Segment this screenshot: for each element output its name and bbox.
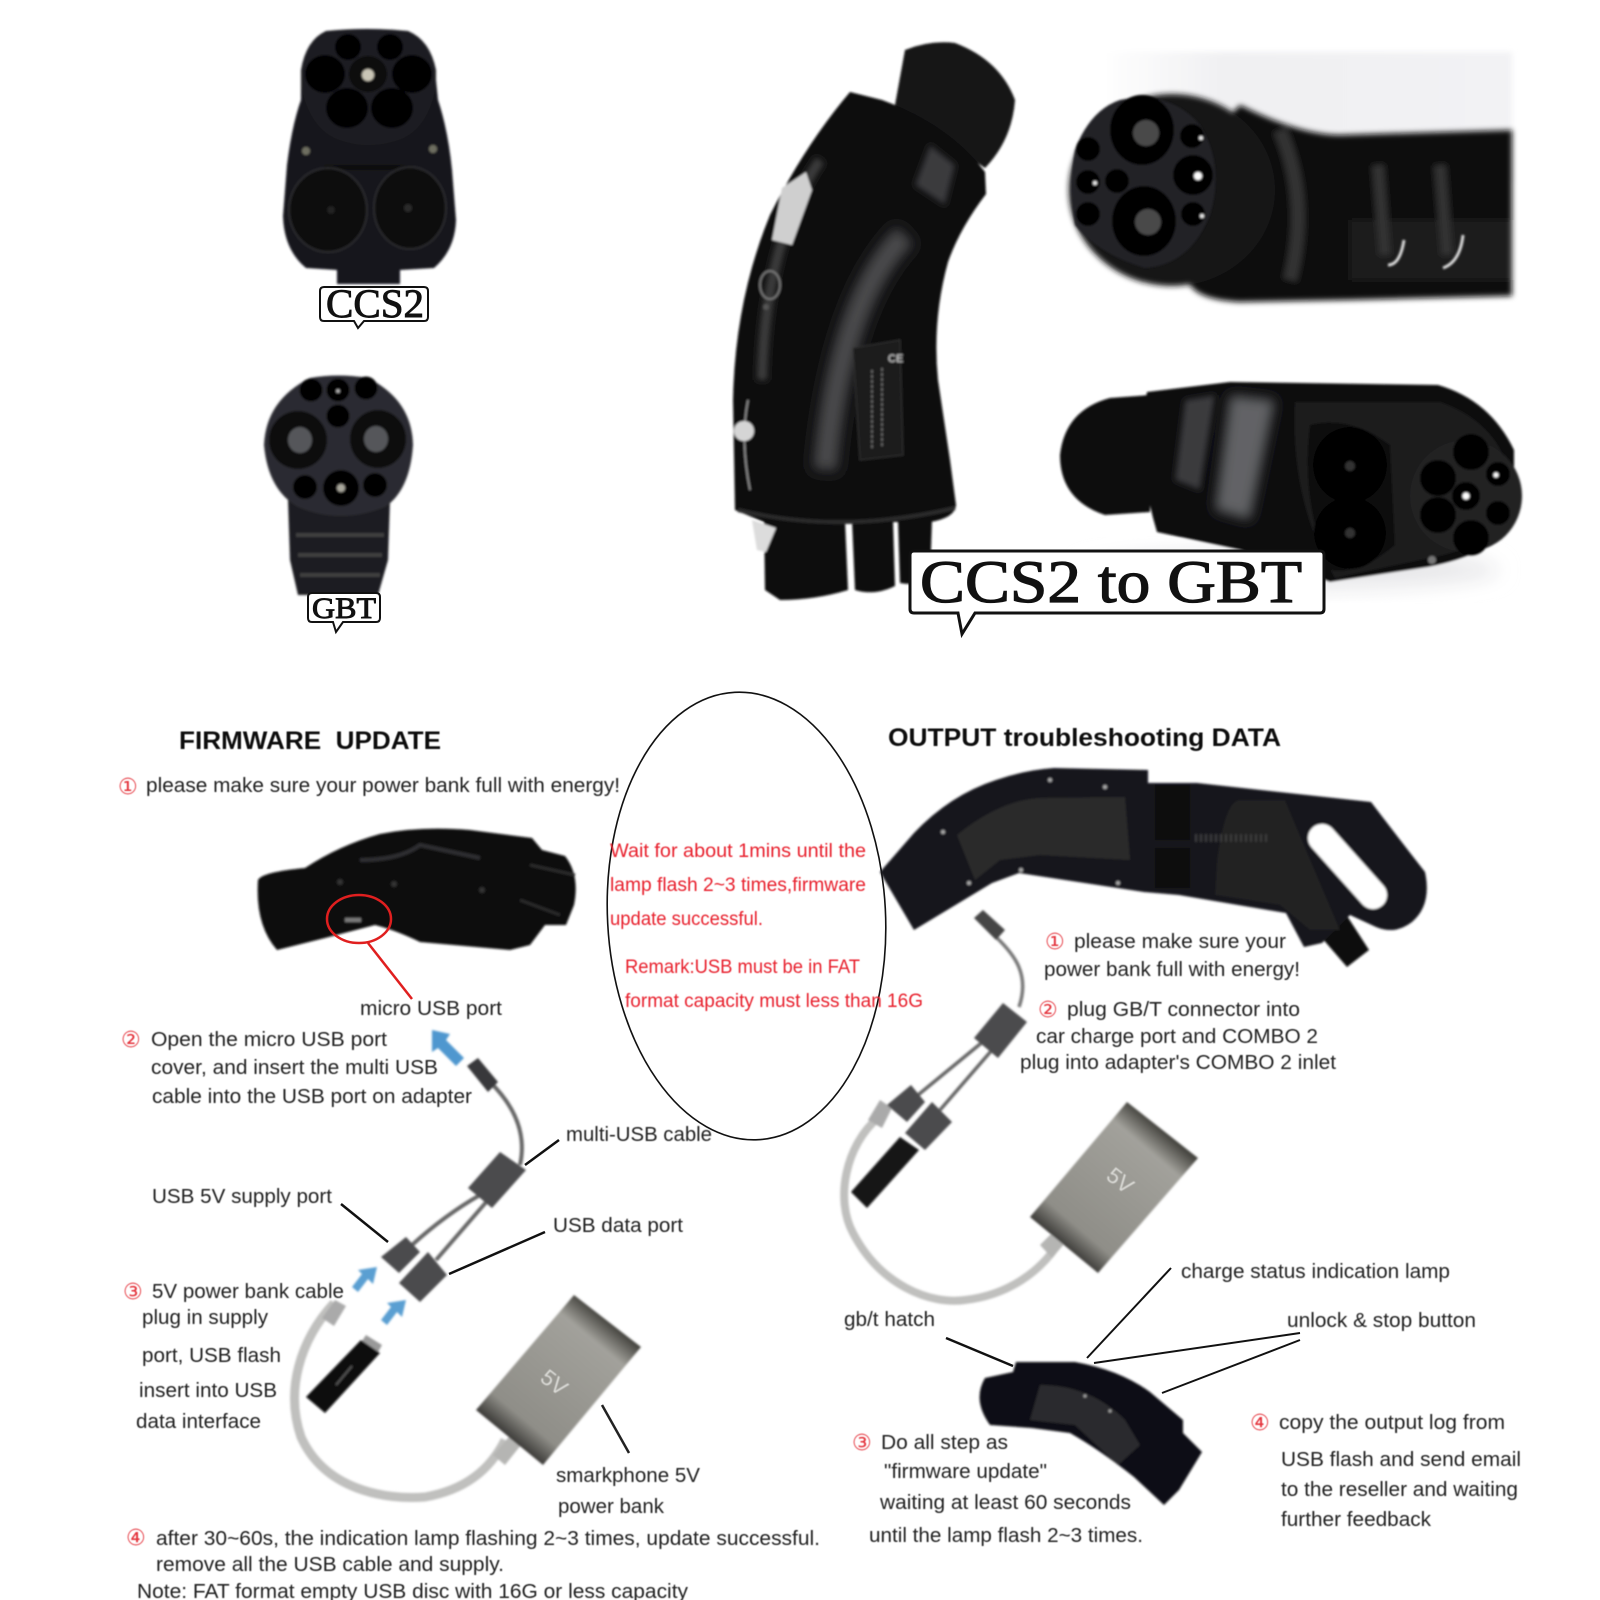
callout: red firmware note: update successful. bbox=[610, 909, 763, 930]
label: charge status indication lamp bbox=[1087, 1261, 1450, 1358]
label: CCS2 to GBT bbox=[910, 549, 1324, 634]
label: smartphone power bank bbox=[556, 1465, 701, 1518]
step 4: firmware: after 30~60s, the indication lamp flashing 2~3 times, update successful. bbox=[156, 1528, 820, 1550]
step 4: firmware: ④ bbox=[126, 1526, 146, 1551]
illustration: power bank cable bbox=[295, 1300, 525, 1497]
photo: adapter GBT face view bbox=[1069, 52, 1512, 302]
step 4: firmware: remove all the USB cable and supply. bbox=[156, 1554, 504, 1576]
step 4: output: copy the output log from bbox=[1279, 1412, 1505, 1434]
step 1: output: ① bbox=[1045, 930, 1065, 955]
step 3: output: waiting at least 60 seconds bbox=[879, 1492, 1131, 1514]
step 2: output: car charge port and COMBO 2 bbox=[1036, 1026, 1318, 1048]
arrow: into supply port bbox=[352, 1267, 377, 1292]
step 4: output: USB flash and send email bbox=[1281, 1449, 1521, 1471]
step 3: firmware bbox=[123, 1280, 344, 1433]
step 4: firmware bbox=[126, 1526, 820, 1600]
step 2: output bbox=[1020, 998, 1336, 1074]
step 3: output bbox=[852, 1431, 1143, 1547]
step 4: output: further feedback bbox=[1281, 1509, 1432, 1531]
step 2: firmware: cover, and insert the multi USB bbox=[151, 1057, 438, 1079]
heading: firmware update: FIRMWARE UPDATE bbox=[179, 727, 441, 755]
photo: adapter side view: CE bbox=[888, 353, 903, 365]
label: USB data port: USB data port bbox=[553, 1215, 683, 1237]
label: CCS2 to GBT: CCS2 to GBT bbox=[920, 549, 1302, 615]
step 2: firmware: cable into the USB port on adapter bbox=[152, 1086, 472, 1108]
callout: red firmware note: Wait for about 1mins until the bbox=[610, 841, 866, 862]
label: CCS2: CCS2 bbox=[326, 281, 424, 326]
step 1: firmware: please make sure your power bank full with energy! bbox=[146, 775, 620, 797]
callout: red firmware note bbox=[610, 841, 923, 1012]
photo: adapter CCS2 face view bbox=[1060, 382, 1522, 590]
step 2: output: plug into adapter's COMBO 2 inlet bbox=[1020, 1052, 1336, 1074]
illustration: adapter with micro USB port bbox=[258, 829, 576, 999]
step 3: firmware: 5V power bank cable bbox=[152, 1281, 344, 1303]
step 1: firmware: ① bbox=[118, 775, 138, 800]
icon: 5V power bank: 5V bbox=[536, 1365, 573, 1401]
label: multi-USB cable: multi-USB cable bbox=[566, 1124, 712, 1146]
illustration: multi-USB cable and power bank, output: 5V bbox=[1102, 1163, 1139, 1199]
step 3: firmware: port, USB flash bbox=[142, 1345, 281, 1367]
callout: red firmware note: Remark:USB must be in FAT bbox=[625, 957, 860, 978]
illustration: small adapter bbox=[980, 1362, 1202, 1505]
step 3: output: until the lamp flash 2~3 times. bbox=[869, 1525, 1143, 1547]
step 2: firmware bbox=[121, 1028, 472, 1108]
label: USB 5V supply port: USB 5V supply port bbox=[152, 1186, 332, 1208]
oval callout outline bbox=[596, 685, 897, 1147]
callout: red firmware note: lamp flash 2~3 times,firmware bbox=[610, 875, 866, 896]
step 3: firmware: plug in supply bbox=[142, 1307, 268, 1329]
label: USB data port bbox=[449, 1215, 683, 1274]
step 2: firmware: ② bbox=[121, 1028, 141, 1053]
step 3: output: Do all step as bbox=[881, 1432, 1008, 1454]
step 3: output: ③ bbox=[852, 1431, 872, 1456]
step 3: output: "firmware update" bbox=[884, 1461, 1047, 1483]
icon: 5V power bank bbox=[476, 1295, 641, 1465]
photo: CCS2 connector bbox=[283, 29, 456, 284]
heading: output troubleshooting data: OUTPUT troubleshooting DATA bbox=[888, 724, 1281, 752]
label: GBT: GBT bbox=[312, 592, 376, 625]
step 3: firmware: ③ bbox=[123, 1280, 143, 1305]
illustration: multi-USB cable bbox=[381, 1058, 526, 1302]
photo: adapter side view bbox=[733, 42, 1015, 600]
step 4: output: to the reseller and waiting bbox=[1281, 1479, 1518, 1501]
label: gb/t hatch bbox=[844, 1309, 1013, 1366]
step 1: output: power bank full with energy! bbox=[1044, 959, 1300, 981]
illustration: multi-USB cable and power bank, output bbox=[844, 910, 1198, 1301]
label: charge status indication lamp: charge status indication lamp bbox=[1181, 1261, 1450, 1283]
step 3: firmware: insert into USB bbox=[139, 1380, 277, 1402]
step 1: output: please make sure your bbox=[1074, 931, 1286, 953]
photo: GBT connector bbox=[264, 376, 413, 595]
step 2: output: plug GB/T connector into bbox=[1067, 999, 1300, 1021]
step 1: output bbox=[1044, 930, 1300, 981]
label: multi-USB cable bbox=[525, 1124, 712, 1165]
step 2: firmware: Open the micro USB port bbox=[151, 1029, 387, 1051]
label: smartphone power bank: smarkphone 5V bbox=[556, 1465, 701, 1487]
label: gb/t hatch: gb/t hatch bbox=[844, 1309, 935, 1331]
label: GBT bbox=[308, 592, 380, 632]
label: unlock and stop button bbox=[1094, 1310, 1476, 1393]
label: USB 5V supply port bbox=[152, 1186, 388, 1242]
arrow: into data port bbox=[381, 1300, 406, 1325]
step 4: output bbox=[1250, 1411, 1521, 1531]
step 2: output: ② bbox=[1038, 998, 1058, 1023]
arrow: into micro USB port bbox=[432, 1030, 464, 1066]
label: unlock and stop button: unlock & stop button bbox=[1287, 1310, 1476, 1332]
icon: USB flash drive bbox=[306, 1335, 382, 1413]
illustration: adapter with handle bbox=[880, 768, 1427, 967]
callout: red firmware note: format capacity must less than 16G bbox=[625, 991, 923, 1012]
label: micro USB port: micro USB port bbox=[360, 998, 502, 1020]
label: smartphone power bank: power bank bbox=[558, 1496, 665, 1518]
step 4: output: ④ bbox=[1250, 1411, 1270, 1436]
step 3: firmware: data interface bbox=[136, 1411, 261, 1433]
